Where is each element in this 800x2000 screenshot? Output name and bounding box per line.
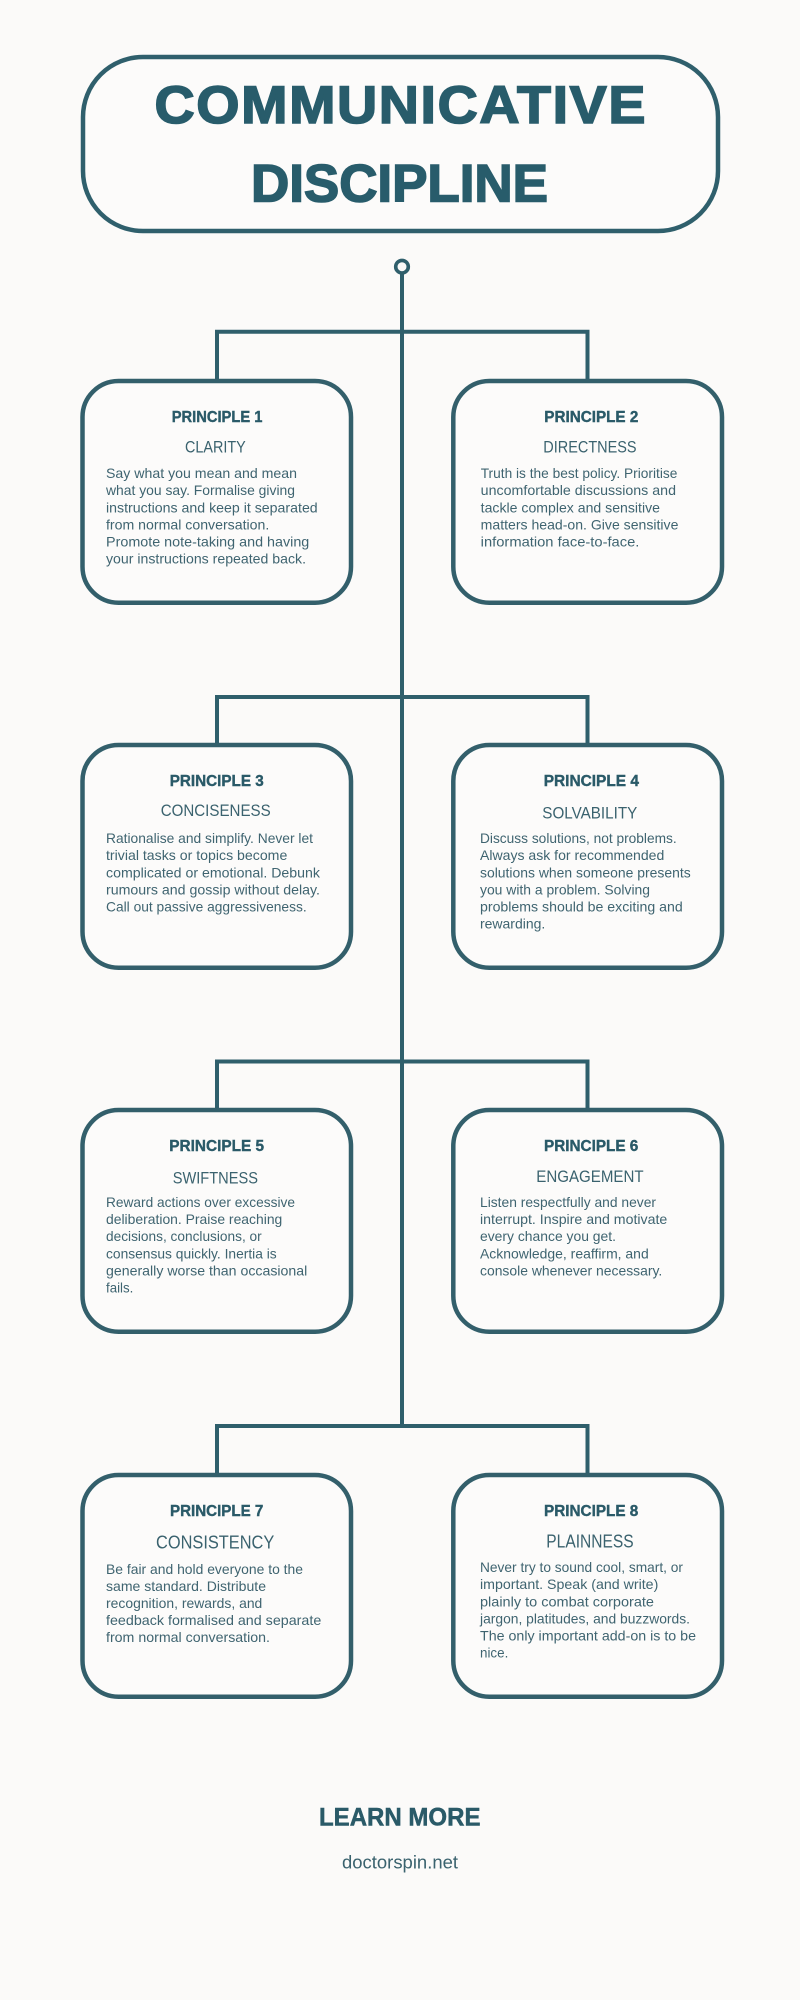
body text: engagement: every chance you get.	[480, 1229, 616, 1244]
heading: principle 3: PRINCIPLE 3	[170, 773, 264, 790]
body text: conciseness: Rationalise and simplify. Never let	[106, 831, 313, 846]
connector tree	[217, 260, 588, 1475]
body text: swiftness	[106, 1195, 307, 1295]
subheading: consistency: CONSISTENCY	[156, 1532, 274, 1552]
footer: website link: doctorspin.net	[342, 1851, 458, 1872]
body text: plainness: plainly to combat corporate	[480, 1594, 654, 1609]
subheading: engagement: ENGAGEMENT	[536, 1167, 644, 1186]
body text: clarity: from normal conversation.	[106, 517, 269, 532]
panel: principle 2	[453, 381, 722, 603]
body text: directness	[481, 466, 679, 549]
body text: clarity: instructions and keep it separated	[106, 500, 318, 515]
heading: principle 1: PRINCIPLE 1	[172, 409, 262, 426]
subheading: solvability: SOLVABILITY	[542, 803, 637, 822]
heading: principle 6: PRINCIPLE 6	[544, 1138, 638, 1155]
subheading: conciseness: CONCISENESS	[161, 801, 271, 820]
body text: swiftness: decisions, conclusions, or	[106, 1229, 262, 1244]
title heading: COMMUNICATIVE	[154, 75, 645, 135]
body text: conciseness: complicated or emotional. Debunk	[106, 865, 320, 880]
panel: principle 5	[82, 1110, 351, 1332]
body text: consistency: recognition, rewards, and	[106, 1596, 262, 1611]
body text: conciseness: trivial tasks or topics become	[106, 848, 288, 863]
body text: consistency: feedback formalised and separate	[106, 1613, 322, 1628]
subheading: clarity: CLARITY	[185, 437, 246, 456]
body text: engagement: Acknowledge, reaffirm, and	[480, 1246, 649, 1261]
body text: clarity	[105, 466, 318, 566]
body text: engagement: interrupt. Inspire and motivate	[480, 1212, 668, 1227]
panel: principle 1	[82, 381, 351, 603]
body text: clarity: what you say. Formalise giving	[105, 483, 295, 498]
body text: solvability: problems should be exciting and	[480, 899, 683, 914]
body text: consistency: same standard. Distribute	[106, 1579, 266, 1594]
body text: plainness: nice.	[480, 1645, 508, 1660]
body text: directness: tackle complex and sensitive	[481, 500, 660, 515]
body text: conciseness: Call out passive aggressiveness.	[106, 899, 307, 914]
body text: swiftness: fails.	[106, 1280, 133, 1295]
heading: principle 2: PRINCIPLE 2	[544, 409, 638, 426]
panel: principle 8	[453, 1475, 722, 1697]
body text: plainness: Never try to sound cool, smart, or	[480, 1560, 683, 1575]
heading: principle 4: PRINCIPLE 4	[544, 773, 639, 790]
body text: solvability: Always ask for recommended	[480, 848, 664, 863]
body text: solvability: you with a problem. Solving	[480, 882, 650, 897]
body text: directness: information face-to-face.	[481, 534, 639, 549]
body text: solvability: rewarding.	[480, 916, 545, 931]
body text: plainness	[479, 1560, 696, 1660]
body text: plainness: The only important add-on is to be	[480, 1628, 696, 1643]
heading: principle 5: PRINCIPLE 5	[169, 1138, 264, 1155]
body text: consistency: Be fair and hold everyone to the	[106, 1562, 303, 1577]
footer: learn more heading: LEARN MORE	[319, 1804, 480, 1832]
body text: clarity: Say what you mean and mean	[106, 466, 297, 481]
title panel	[83, 57, 718, 231]
body text: conciseness: rumours and gossip without delay.	[106, 882, 320, 897]
body text: directness: Truth is the best policy. Prioritise	[481, 466, 678, 481]
body text: solvability	[480, 831, 691, 931]
subheading: directness: DIRECTNESS	[543, 437, 637, 456]
subheading: swiftness: SWIFTNESS	[173, 1168, 258, 1187]
heading: principle 7: PRINCIPLE 7	[170, 1503, 263, 1520]
body text: swiftness: deliberation. Praise reaching	[106, 1212, 282, 1227]
panel: principle 3	[82, 745, 351, 968]
body text: consistency	[106, 1562, 322, 1645]
body text: consistency: from normal conversation.	[106, 1630, 270, 1645]
body text: swiftness: generally worse than occasional	[106, 1263, 307, 1278]
body text: plainness: important. Speak (and write)	[480, 1577, 658, 1592]
title heading: DISCIPLINE	[251, 154, 548, 214]
panel: principle 7	[82, 1475, 351, 1697]
body text: engagement: Listen respectfully and never	[480, 1195, 656, 1210]
body text: swiftness: Reward actions over excessive	[106, 1195, 295, 1210]
body text: directness: uncomfortable discussions and	[481, 483, 676, 498]
body text: solvability: solutions when someone presents	[480, 865, 691, 880]
panel: principle 6	[453, 1110, 722, 1332]
heading: principle 8: PRINCIPLE 8	[544, 1503, 638, 1520]
body text: solvability: Discuss solutions, not problems.	[480, 831, 677, 846]
body text: directness: matters head-on. Give sensitive	[481, 517, 679, 532]
title heading	[154, 75, 645, 214]
panel: principle 4	[453, 745, 722, 968]
body text: plainness: jargon, platitudes, and buzzwords.	[479, 1611, 690, 1626]
body text: clarity: Promote note-taking and having	[106, 534, 309, 549]
body text: conciseness	[106, 831, 320, 914]
body text: engagement	[480, 1195, 668, 1278]
body text: swiftness: consensus quickly. Inertia is	[106, 1246, 277, 1261]
body text: clarity: your instructions repeated back.	[106, 551, 306, 566]
body text: engagement: console whenever necessary.	[480, 1263, 662, 1278]
subheading: plainness: PLAINNESS	[546, 1531, 634, 1551]
